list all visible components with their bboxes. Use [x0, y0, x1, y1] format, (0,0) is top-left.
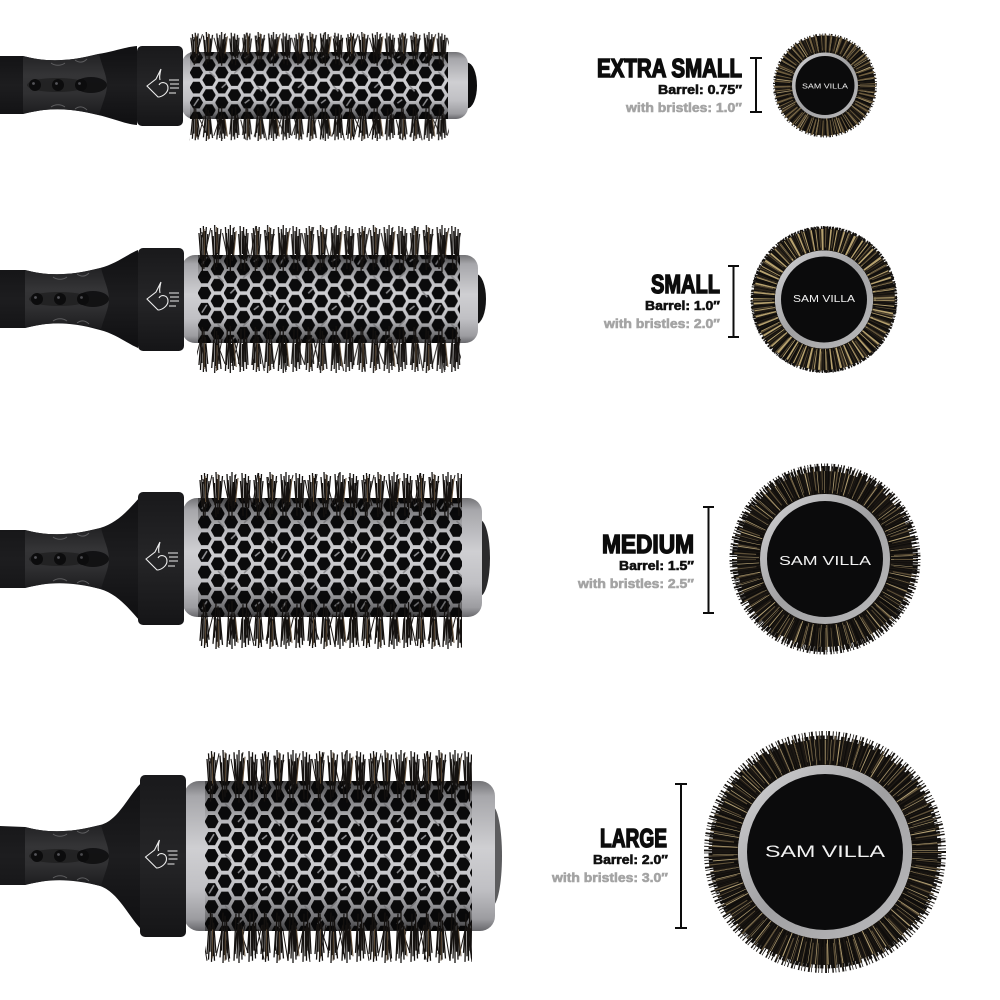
end cap — [457, 62, 477, 108]
label: medium — [577, 529, 694, 591]
brush: small side view — [0, 225, 486, 373]
collar — [138, 492, 184, 625]
barrel size: Barrel: 0.75″ — [658, 82, 742, 97]
brush head: medium — [741, 475, 909, 643]
size bracket: small — [728, 266, 739, 337]
barrel size: Barrel: 2.0″ — [593, 852, 668, 867]
icon: hand — [147, 282, 179, 310]
end cap — [466, 274, 486, 324]
label: extra small — [597, 53, 742, 115]
end cap — [482, 806, 502, 906]
size bracket: medium — [703, 507, 714, 613]
hexagon vents — [190, 52, 448, 119]
hexagon vents — [205, 781, 472, 931]
handle — [0, 250, 138, 348]
label: small — [603, 269, 720, 331]
size with bristles: with bristles: 2.5″ — [577, 576, 694, 591]
barrel — [182, 255, 478, 343]
size with bristles: with bristles: 1.0″ — [625, 100, 742, 115]
brush head: extra small — [780, 40, 870, 130]
heading: MEDIUM — [602, 529, 694, 559]
logo: SAM VILLA — [802, 82, 848, 90]
bristles — [205, 750, 472, 808]
end cap — [470, 520, 490, 596]
barrel — [184, 781, 495, 931]
logo: SAM VILLA — [793, 294, 855, 305]
barrel — [183, 498, 482, 617]
barrel size: Barrel: 1.5″ — [619, 558, 694, 573]
icon: hand — [146, 542, 178, 570]
barrel size: Barrel: 1.0″ — [645, 298, 720, 313]
bristles — [197, 225, 461, 277]
grip — [23, 54, 107, 115]
bristles — [189, 32, 449, 68]
size bracket: large — [675, 784, 687, 928]
hexagon vents — [198, 498, 462, 617]
size with bristles: with bristles: 3.0″ — [551, 870, 668, 885]
label: large — [551, 823, 668, 885]
handle — [0, 46, 137, 125]
icon: hand — [147, 69, 179, 97]
bristles — [198, 472, 462, 524]
brush: medium side view — [0, 472, 490, 649]
grip — [25, 528, 109, 589]
handle — [0, 782, 142, 930]
heading: LARGE — [600, 823, 667, 853]
logo: SAM VILLA — [779, 553, 871, 568]
brush head: small — [760, 236, 888, 364]
size with bristles: with bristles: 2.0″ — [603, 316, 720, 331]
handle — [0, 497, 140, 621]
size bracket: extra small — [750, 58, 762, 112]
hexagon vents — [198, 255, 460, 343]
collar — [138, 248, 184, 351]
heading: EXTRA SMALL — [597, 53, 742, 83]
grip — [25, 825, 109, 886]
icon: hand — [146, 840, 178, 868]
collar — [140, 775, 186, 937]
heading: SMALL — [651, 269, 720, 299]
logo: SAM VILLA — [765, 842, 886, 861]
brush: extra small side view — [0, 32, 477, 141]
brush: large side view — [0, 750, 502, 963]
brush head: large — [717, 744, 933, 960]
collar — [137, 46, 183, 126]
barrel — [182, 52, 468, 119]
grip — [25, 268, 109, 329]
